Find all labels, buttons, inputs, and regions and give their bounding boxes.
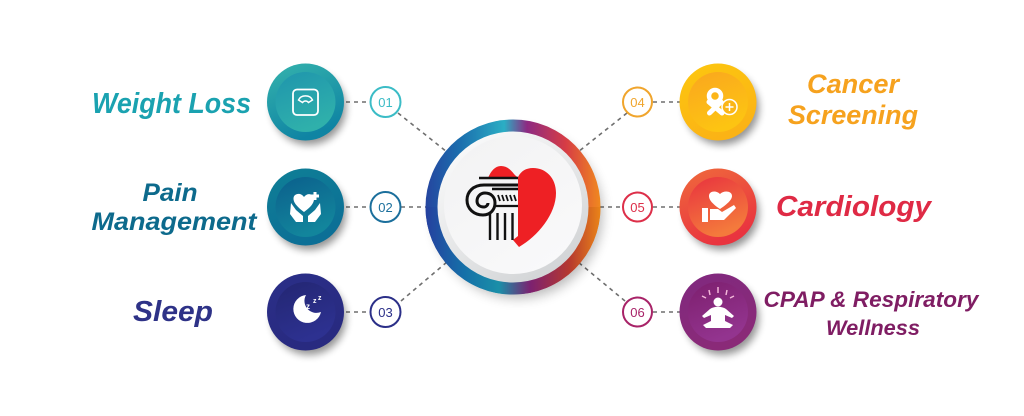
icon disc: teal: [267, 64, 346, 145]
icon: heart half: [488, 166, 556, 247]
number badge 04: 04: [630, 95, 645, 110]
label: cancer screening: Screening: [788, 100, 919, 130]
central emblem: [426, 120, 602, 298]
icon: ribbon with plus: [709, 90, 737, 114]
icon: scale: [293, 90, 318, 115]
icon: moon and zzz: z: [318, 295, 322, 302]
item 05: [623, 168, 933, 250]
label: weight loss: Weight Loss: [92, 88, 251, 120]
number badge 03: [370, 297, 400, 327]
number badge 05: [623, 192, 652, 222]
label: cpap and respiratory wellness: Wellness: [826, 317, 920, 340]
icon disc: dark teal: [267, 168, 346, 250]
label: cpap and respiratory wellness: [764, 287, 980, 340]
icon: moon and zzz: z: [306, 302, 310, 311]
label: cpap and respiratory wellness: CPAP & Respiratory: [764, 287, 980, 312]
icon: hands holding heart: [290, 192, 321, 222]
icon: moon and zzz: z: [313, 298, 317, 305]
label: pain management: Pain: [142, 179, 198, 207]
item 06: [623, 274, 980, 355]
icon disc: purple: [680, 274, 759, 355]
number badge 03: 03: [378, 305, 393, 320]
number badge 06: 06: [630, 305, 645, 320]
item 02: [92, 168, 400, 250]
number badge 04: [623, 88, 652, 116]
icon disc: navy: [267, 274, 346, 355]
label: cancer screening: [788, 69, 919, 130]
item 01: [92, 64, 400, 145]
item 03: [133, 274, 400, 355]
label: cancer screening: Cancer: [807, 69, 901, 99]
icon disc: yellow: [680, 64, 759, 145]
number badge 01: 01: [378, 95, 393, 110]
label: sleep: Sleep: [133, 296, 213, 328]
item 04: [623, 64, 919, 145]
icon: meditation figure: [702, 287, 734, 328]
label: cardiology: Cardiology: [776, 191, 933, 223]
connector lines: [346, 102, 680, 312]
icon: moon and zzz: [293, 295, 322, 323]
number badge 05: 05: [630, 200, 645, 215]
icon: hand holding heart: [702, 192, 736, 222]
icon disc: red orange: [680, 168, 759, 250]
label: pain management: Management: [92, 208, 258, 236]
icon: classical column: [467, 178, 518, 240]
number badge 06: [623, 298, 652, 326]
number badge 01: [370, 87, 400, 117]
label: pain management: [92, 179, 258, 236]
number badge 02: 02: [378, 200, 393, 215]
number badge 02: [370, 192, 400, 222]
